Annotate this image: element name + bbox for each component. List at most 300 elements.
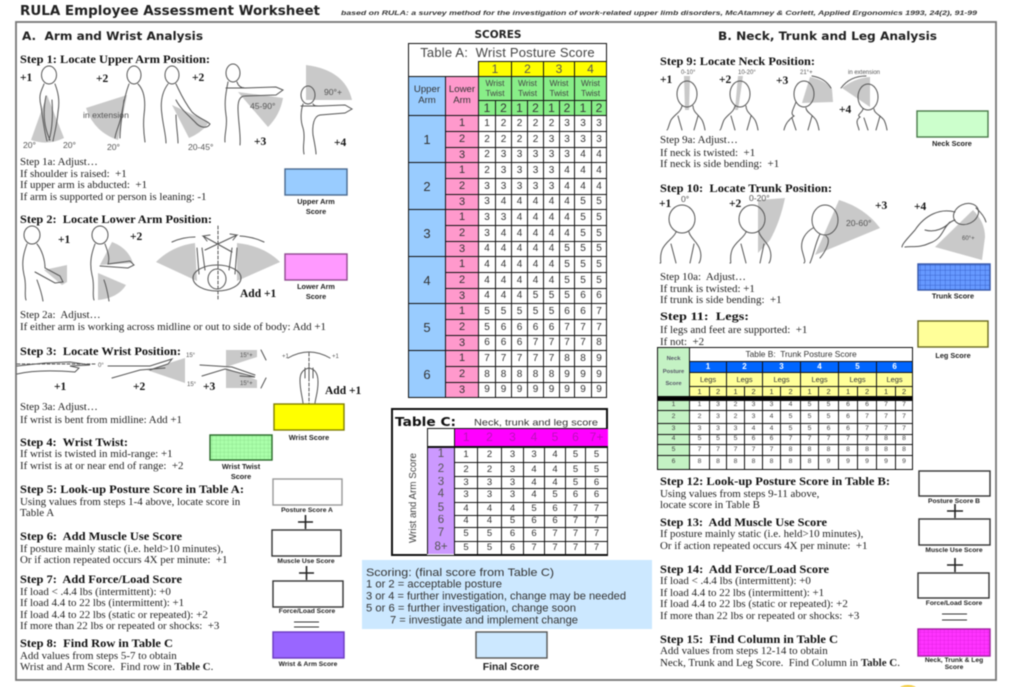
table A: wrist posture score: 1 — [459, 211, 465, 223]
table A: wrist posture score: 4 — [587, 62, 594, 76]
labels: upper arm scores: +2 — [96, 73, 109, 85]
score box: leg: Leg Score — [935, 351, 971, 360]
table B: trunk posture score: Legs — [811, 375, 828, 384]
table C: final score grid: 6 — [531, 528, 537, 539]
table A: wrist posture score: 4 — [501, 243, 506, 254]
score box: wrist twist: Score — [231, 472, 251, 481]
table C: final score grid: 7 — [552, 528, 558, 539]
table A: wrist posture score: 8 — [596, 337, 602, 348]
table A: wrist posture score: 1 — [492, 62, 498, 76]
table A: wrist posture score: 3 — [517, 149, 522, 160]
table A: wrist posture score: 3 — [549, 134, 554, 144]
score box: neck: Neck Score — [932, 139, 972, 148]
labels: wrist scores: 15°+ — [240, 381, 253, 387]
table C: final score grid: 2 — [487, 464, 492, 475]
table A: wrist posture score: 4 — [501, 290, 506, 301]
labels: trunk scores: +2 — [729, 198, 742, 210]
step 5 text: Step 5: Look-up Posture Score in Table A: — [20, 482, 244, 496]
panel: B. neck, trunk and leg analysis — [659, 29, 990, 671]
table A: wrist posture score: 4 — [517, 212, 522, 222]
table A: wrist posture score: 3 — [596, 118, 602, 128]
table C: final score grid: 5 — [510, 515, 515, 526]
table A: wrist posture score: 7 — [580, 322, 586, 332]
table B: trunk posture score: 9 — [865, 458, 869, 465]
step 9a adjust text: If neck is twisted: +1 — [660, 147, 755, 159]
table B: trunk posture score: 6 — [827, 425, 830, 432]
step 14 text: If load 4.4 to 22 lbs (intermittent): +1 — [660, 587, 824, 599]
step 1a adjust text — [20, 156, 207, 203]
step 5 text: Using values from steps 1-4 above, locate score in — [20, 496, 241, 508]
table B: trunk posture score: 1 — [672, 401, 675, 408]
table B: trunk posture score: 1 — [706, 362, 710, 371]
step 15 text — [660, 632, 900, 669]
table A: wrist posture score: 8 — [580, 352, 586, 364]
step 8 text: Add values from steps 5-7 to obtain — [20, 650, 177, 662]
table A: wrist posture score: 5 — [596, 196, 602, 207]
table A: wrist posture score: 7 — [549, 352, 554, 364]
table A: wrist posture score: 8 — [501, 368, 506, 380]
table A: wrist posture score: 5 — [580, 274, 586, 286]
table C: final score grid: 4 — [438, 488, 444, 500]
table A: wrist posture score: 3 — [484, 180, 490, 192]
table C: final score grid: 4 — [487, 515, 492, 526]
table C: final score grid: 5 — [463, 528, 469, 539]
table C: final score grid: 3 — [487, 489, 492, 500]
table B: trunk posture score: 1 — [884, 387, 888, 396]
table A: wrist posture score: 1 — [459, 352, 465, 364]
step 9a adjust text — [660, 134, 779, 170]
table A: wrist posture score: 4 — [501, 228, 506, 238]
table B: trunk posture score: 4 — [817, 362, 822, 371]
table A: wrist posture score: 4 — [580, 180, 586, 192]
table B: trunk posture score: 3 — [734, 425, 737, 432]
table A: wrist posture score: 4 — [564, 180, 570, 192]
figures: neck positions — [667, 76, 887, 130]
table A: wrist posture score: 2 — [459, 227, 465, 239]
table B: trunk posture score: 5 — [855, 362, 860, 371]
table C: final score grid: 2 — [463, 464, 469, 475]
table A: wrist posture score: 3 — [501, 212, 506, 222]
table A: wrist posture score: 5 — [596, 228, 602, 238]
table B: trunk posture score: 5 — [808, 425, 811, 432]
step 2a adjust text — [20, 309, 326, 333]
table B: trunk posture score: 3 — [716, 401, 720, 408]
table A: wrist posture score: Wrist — [486, 78, 504, 88]
table A: wrist posture score: 7 — [533, 352, 538, 364]
table A: wrist posture score: 6 — [564, 306, 570, 316]
table A: wrist posture score: 6 — [549, 322, 554, 332]
table A: wrist posture score: Wrist — [581, 78, 600, 88]
labels: wrist scores: +3 — [203, 381, 216, 393]
table B: trunk posture score: Legs — [773, 375, 790, 384]
table C: final score grid: 6 — [510, 528, 515, 539]
labels: neck scores: in extension — [848, 70, 880, 76]
table A: wrist posture score: 9 — [596, 352, 602, 364]
step 15 text: Add values from steps 12-14 to obtain — [660, 645, 828, 657]
step 8 text: Wrist and Arm Score. Find row in Table C. — [20, 661, 214, 673]
table C: final score grid: 1 — [463, 430, 470, 444]
panel: scoring key: 7 = investigate and implement change — [390, 614, 578, 626]
table A: wrist posture score: 5 — [580, 196, 586, 207]
table C: final score grid: 4 — [552, 464, 558, 475]
table A: wrist posture score: 2 — [596, 101, 602, 115]
table A: wrist posture score: 9 — [596, 368, 602, 380]
table A: wrist posture score: 4 — [484, 258, 490, 270]
table A: wrist posture score: 3 — [501, 164, 506, 176]
table B: trunk posture score: 2 — [672, 413, 675, 420]
labels: upper arm scores: +1 — [20, 72, 33, 84]
table A: wrist posture score — [408, 43, 607, 398]
table A: wrist posture score: 3 — [501, 180, 506, 192]
table A: wrist posture score: 5 — [580, 212, 586, 222]
table C: final score grid: 7 — [594, 503, 599, 514]
heading: scores: SCORES — [474, 29, 522, 41]
step 3a adjust text — [20, 401, 182, 426]
table B: trunk posture score: 2 — [716, 387, 720, 396]
table C: final score grid: 5 — [594, 464, 599, 475]
table B: trunk posture score: 2 — [751, 387, 756, 396]
score box: posture score B — [919, 471, 990, 505]
table A: wrist posture score: 1 — [459, 117, 465, 129]
score box: upper arm — [285, 169, 347, 216]
table A: wrist posture score: Twist — [581, 88, 600, 98]
table A: wrist posture score: 4 — [501, 196, 506, 207]
table C: final score grid: 5 — [487, 542, 492, 553]
table A: wrist posture score: 7 — [549, 337, 554, 348]
table A: wrist posture score: 3 — [459, 384, 465, 396]
table A: wrist posture score: 5 — [580, 243, 586, 254]
score box: neck, trunk and leg: Score — [945, 664, 964, 671]
table B: trunk posture score: 7 — [734, 446, 737, 453]
table B: trunk posture score: 2 — [742, 362, 747, 371]
plus — [298, 515, 313, 529]
table A: wrist posture score: Upper — [414, 84, 440, 95]
table A: wrist posture score: 3 — [484, 228, 490, 238]
table B: trunk posture score: 3 — [779, 362, 784, 371]
table A: wrist posture score: 4 — [564, 212, 570, 222]
table C: final score grid: 5 — [552, 430, 558, 444]
table A: wrist posture score: 4 — [564, 196, 570, 207]
figures: upper arm positions — [31, 64, 352, 154]
table A: wrist posture score: 4 — [533, 258, 538, 270]
table A: wrist posture score: 5 — [533, 290, 538, 301]
final score box — [476, 632, 547, 673]
table B: trunk posture score — [657, 347, 913, 470]
score box: neck, trunk and leg — [918, 629, 990, 671]
labels: neck scores: +1 — [660, 74, 673, 86]
table C: final score grid: 6 — [552, 503, 558, 514]
table C: final score grid: 5 — [573, 449, 578, 460]
table A: wrist posture score: 6 — [517, 337, 522, 348]
labels: neck scores: 21°+ — [800, 70, 813, 76]
table B: trunk posture score: 1 — [698, 401, 701, 408]
table A: wrist posture score: Wrist — [550, 78, 568, 88]
labels: upper arm scores: +3 — [254, 136, 267, 148]
table A: wrist posture score: 4 — [533, 212, 538, 222]
table A: wrist posture score: 4 — [549, 228, 554, 238]
step 3a adjust text: If wrist is bent from midline: Add +1 — [20, 414, 182, 426]
table A: wrist posture score: 4 — [533, 243, 538, 254]
table B: trunk posture score: 1 — [846, 387, 850, 396]
table B: trunk posture score: 8 — [734, 458, 737, 465]
score box: trunk — [918, 264, 990, 300]
table B: trunk posture score: 3 — [752, 413, 755, 420]
table C: final score grid: 6 — [531, 515, 537, 526]
figures: wrist positions — [17, 350, 330, 404]
table B: trunk posture score: 8 — [884, 435, 888, 442]
step 9 heading: Step 9: Locate Neck Position: — [660, 54, 815, 68]
table B: trunk posture score: 6 — [672, 458, 675, 465]
table B: trunk posture score: 5 — [789, 425, 792, 432]
table A: wrist posture score: 4 — [596, 180, 602, 192]
table A: wrist posture score: 3 — [517, 164, 522, 176]
panel: A. arm and wrist analysis — [17, 29, 362, 673]
table C: final score grid: 7 — [531, 542, 537, 553]
table A: wrist posture score: 1 — [484, 118, 490, 128]
labels: wrist scores: +2 — [133, 381, 146, 393]
table C: final score grid: 4 — [552, 449, 558, 460]
table A: wrist posture score: 2 — [484, 164, 490, 176]
step 10a adjust text — [660, 271, 782, 306]
table A: wrist posture score: 3 — [459, 148, 465, 160]
table B: trunk posture score: 5 — [734, 435, 737, 442]
table A: wrist posture score: 4 — [423, 272, 431, 288]
table A: wrist posture score: 3 — [459, 336, 465, 348]
table C: final score grid: 1 — [463, 449, 469, 460]
table A: wrist posture score: 1 — [459, 305, 465, 317]
table B: trunk posture score: 2 — [734, 413, 737, 420]
equals — [942, 614, 967, 620]
table A: wrist posture score: 6 — [423, 366, 431, 382]
labels: trunk scores: 0° — [681, 194, 689, 204]
table B: trunk posture score: 1 — [769, 387, 774, 396]
table B: trunk posture score: 1 — [733, 387, 738, 396]
table A: wrist posture score: 1 — [459, 258, 465, 270]
table B: trunk posture score: 8 — [789, 446, 792, 453]
labels: upper arm scores: in extension — [83, 110, 129, 120]
labels: trunk scores: +1 — [659, 198, 672, 210]
table B: trunk posture score: Posture — [663, 369, 684, 375]
step 6 text — [20, 529, 228, 566]
table A: wrist posture score: 2 — [484, 149, 490, 160]
table A: wrist posture score: 5 — [484, 306, 490, 316]
table B: trunk posture score: 4 — [672, 435, 675, 442]
table A: wrist posture score: 9 — [501, 384, 506, 395]
table A: wrist posture score: 7 — [484, 352, 490, 364]
table A: wrist posture score: 7 — [533, 337, 538, 348]
table A: wrist posture score: 9 — [564, 368, 570, 380]
table A: wrist posture score: 3 — [484, 212, 490, 222]
labels: trunk scores: +4 — [914, 201, 927, 213]
table B: trunk posture score: 1 — [697, 387, 702, 396]
table A: wrist posture score: 2 — [533, 134, 538, 144]
score box: neck — [917, 111, 988, 148]
step 7 text: If load 4.4 to 22 lbs (intermittent): +1 — [20, 597, 184, 609]
table B: trunk posture score: 6 — [865, 401, 869, 408]
table B: trunk posture score: 3 — [672, 425, 675, 432]
table B: trunk posture score: Score — [665, 381, 682, 387]
table B: trunk posture score: 7 — [884, 413, 888, 420]
table B: trunk posture score: 2 — [865, 387, 869, 396]
step 11 text — [660, 309, 807, 348]
table B: trunk posture score: 8 — [902, 446, 906, 453]
step 13 text: Or if action repeated occurs 4X per minute: +1 — [660, 540, 868, 552]
table B: trunk posture score: 7 — [770, 446, 773, 453]
step 2a adjust text: Step 2a: Adjust… — [20, 309, 101, 321]
table C: final score grid: 7 — [573, 503, 578, 514]
step 6 text: If posture mainly static (i.e. held>10 minutes), — [20, 543, 224, 555]
table C: final score grid: 4 — [463, 515, 469, 526]
table A: wrist posture score: 5 — [596, 258, 602, 270]
table C: final score grid: 6 — [594, 476, 599, 488]
table A: wrist posture score: 5 — [580, 228, 586, 238]
table A: wrist posture score: 4 — [501, 258, 506, 270]
table B: trunk posture score: 3 — [716, 425, 720, 432]
step 15 text: Step 15: Find Column in Table C — [660, 632, 838, 646]
table B: trunk posture score: Neck — [667, 356, 680, 362]
step 4 text: Step 4: Wrist Twist: — [20, 435, 128, 449]
table A: wrist posture score: 8 — [484, 368, 490, 380]
plus — [947, 558, 963, 572]
score box: lower arm — [285, 254, 347, 301]
step 1a adjust text: If arm is supported or person is leaning: -1 — [20, 191, 207, 203]
table C: final score grid: 4 — [531, 476, 537, 488]
figures: trunk positions — [660, 198, 986, 263]
labels: neck scores: +3 — [776, 75, 789, 87]
table C: final score grid: 7+ — [590, 430, 603, 444]
labels: lower arm scores: Add +1 — [240, 288, 277, 300]
table B: trunk posture score: 8 — [846, 446, 850, 453]
table C: final score grid: 2 — [438, 463, 444, 475]
table A: wrist posture score: 2 — [501, 118, 506, 128]
table A: wrist posture score: 1 — [484, 101, 490, 115]
table A: wrist posture score: 2 — [517, 134, 522, 144]
table B: trunk posture score: 8 — [808, 446, 811, 453]
table A: wrist posture score: 4 — [549, 274, 554, 286]
table B: trunk posture score: 2 — [698, 413, 701, 420]
score box: trunk: Trunk Score — [932, 292, 974, 300]
table B: trunk posture score: 3 — [698, 425, 701, 432]
table B: trunk posture score: 6 — [752, 435, 755, 442]
table B: trunk posture score: 7 — [698, 446, 701, 453]
table B: trunk posture score: 7 — [884, 425, 888, 432]
table A: wrist posture score: Table A: Wrist Posture Score — [420, 45, 595, 60]
table A: wrist posture score: 6 — [580, 306, 586, 316]
table C: final score grid: 4 — [552, 476, 558, 488]
table C: final score grid: 7 — [552, 542, 558, 553]
labels: neck scores: +2 — [719, 74, 732, 86]
table A: wrist posture score: 4 — [549, 243, 554, 254]
table A: wrist posture score: 3 — [549, 180, 554, 192]
labels: wrist scores: +1 — [282, 354, 290, 360]
table A: wrist posture score: 4 — [484, 274, 490, 286]
table C: final score grid: 7 — [573, 542, 578, 553]
step 11 text: If legs and feet are supported: +1 — [660, 324, 807, 336]
table C: final score grid: 6 — [572, 430, 579, 444]
table B: trunk posture score: 6 — [846, 425, 850, 432]
table C: final score grid: 7 — [594, 515, 599, 526]
step 12 text: Using values from steps 9-11 above, — [660, 488, 820, 500]
score box: wrist twist — [210, 435, 272, 481]
table A: wrist posture score: 4 — [533, 274, 538, 286]
table A: wrist posture score: 2 — [524, 62, 531, 76]
table C: final score grid: 6 — [552, 515, 558, 526]
score box: force/load — [918, 573, 989, 607]
table B: trunk posture score: 7 — [902, 425, 906, 432]
labels: neck scores — [660, 70, 880, 116]
table C: final score grid: 6 — [510, 542, 515, 553]
table C: final score grid: 5 — [531, 503, 537, 514]
table C frame and titles: Table C: — [395, 414, 456, 429]
table A: wrist posture score: 1 — [423, 132, 431, 146]
table B: trunk posture score: Table B: Trunk Posture Score — [745, 349, 857, 359]
table B: trunk posture score: 4 — [789, 401, 792, 408]
step 14 text: If load < .4.4 lbs (intermittent): +0 — [660, 575, 811, 587]
figures: lower arm positions — [23, 226, 280, 301]
table A: wrist posture score: 3 — [556, 62, 562, 76]
table B: trunk posture score: 5 — [808, 413, 811, 420]
table B: trunk posture score: 9 — [884, 458, 888, 465]
table A: wrist posture score: 1 — [516, 101, 523, 115]
table A: wrist posture score: 4 — [549, 258, 554, 270]
step 8 text — [20, 636, 214, 673]
score box: upper arm: Upper Arm — [297, 197, 335, 206]
table B: trunk posture score: 5 — [808, 401, 811, 408]
table A: wrist posture score: 2 — [517, 118, 522, 128]
table A: wrist posture score: 3 — [580, 134, 586, 144]
table A: wrist posture score: 4 — [517, 274, 522, 286]
table A: wrist posture score: 4 — [517, 243, 522, 254]
plus — [947, 504, 963, 518]
table A: wrist posture score: 4 — [484, 243, 490, 254]
table A: wrist posture score: 3 — [564, 134, 570, 144]
step 13 text: Step 13: Add Muscle Use Score — [660, 515, 827, 529]
heading: section B: B. Neck, Trunk and Leg Analysis — [718, 29, 937, 43]
score box: force/load: Force/Load Score — [279, 608, 336, 615]
table A: wrist posture score: 9 — [533, 384, 538, 395]
table B: trunk posture score: 9 — [846, 458, 850, 465]
table B: trunk posture score: 6 — [892, 362, 897, 371]
table B: trunk posture score: 9 — [827, 458, 830, 465]
table A: wrist posture score: 4 — [580, 149, 586, 160]
table A: wrist posture score: 3 — [549, 149, 554, 160]
table C: final score grid: 5 — [487, 528, 492, 539]
table B: trunk posture score: 7 — [827, 435, 830, 442]
table B: trunk posture score: Legs — [887, 375, 903, 384]
labels: wrist scores: +1 — [332, 354, 340, 360]
table A: wrist posture score: 4 — [596, 164, 602, 176]
score box: wrist and arm: Wrist & Arm Score — [279, 661, 338, 668]
table A: wrist posture score: 5 — [549, 306, 554, 316]
citation: based on RULA: a survey method for the investigation of work-related upper limb disorders, McAtamney & Corlett, Applied Ergonomics 1993, 24(2), 91-99 — [341, 10, 978, 17]
table A: wrist posture score: Arm — [418, 95, 436, 106]
step 6 text: Or if action repeated occurs 4X per minute: +1 — [20, 554, 228, 566]
score box: posture score B: Posture Score B — [928, 498, 980, 505]
step 13 text: If posture mainly static (i.e. held>10 minutes), — [660, 528, 864, 540]
table B: trunk posture score: 5 — [672, 446, 675, 453]
labels: wrist scores: +1 — [54, 381, 67, 393]
step 12 text: Step 12: Look-up Posture Score in Table B: — [660, 474, 890, 488]
table A: wrist posture score: 8 — [564, 352, 570, 364]
table B: trunk posture score: 8 — [808, 458, 811, 465]
table B: trunk posture score: 7 — [865, 435, 869, 442]
step 7 text: If load 4.4 to 22 lbs (static or repeated): +2 — [20, 609, 208, 621]
labels: wrist scores: Add +1 — [325, 385, 362, 397]
table A: wrist posture score: 7 — [501, 352, 506, 364]
table A: wrist posture score: 5 — [596, 243, 602, 254]
table B: trunk posture score: 3 — [716, 413, 720, 420]
table A: wrist posture score: 7 — [517, 352, 522, 364]
